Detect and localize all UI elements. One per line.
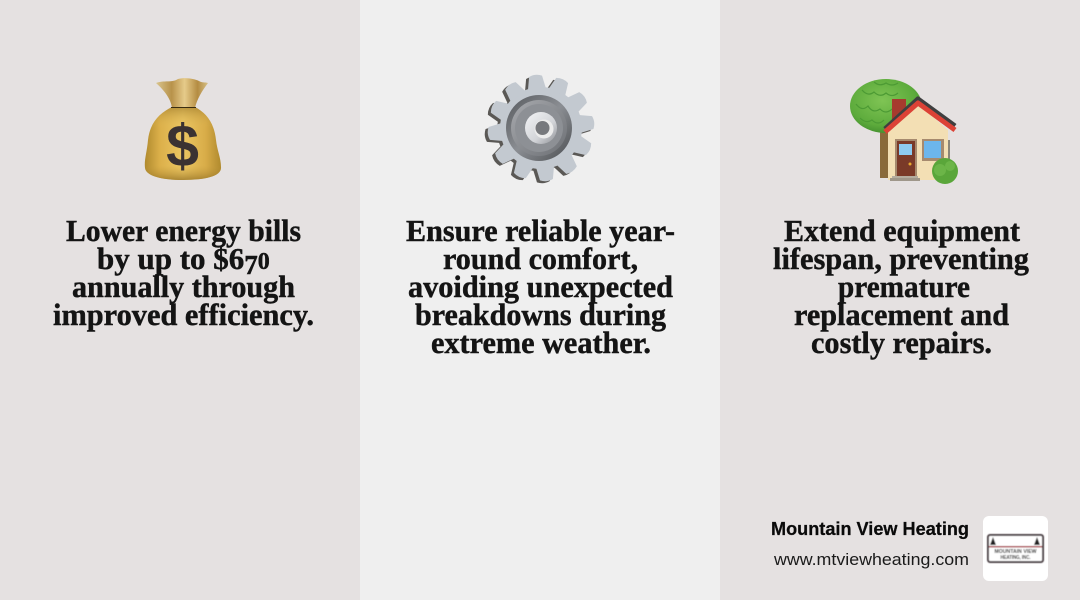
panel: right background [720, 0, 1080, 600]
text block: center column: breakdowns during [415, 297, 666, 332]
text block: left column: Lower energy bills [66, 213, 301, 248]
text block: left column: by up to $6 [97, 241, 244, 276]
text block: left column: 0 [258, 249, 270, 275]
text block: right column: premature [838, 269, 970, 304]
text block: right column: lifespan, preventing [773, 241, 1029, 276]
text block: center column: Ensure reliable year- [406, 213, 675, 248]
icon: money bag [145, 78, 221, 180]
logo: MOUNTAIN VIEW [994, 549, 1037, 555]
text block: right column: costly repairs. [811, 325, 992, 360]
icon: gear [484, 74, 595, 184]
panel: center background [360, 0, 720, 600]
text block: right column [773, 213, 1029, 360]
text block: left column: annually through [72, 269, 295, 304]
text block: right column: Extend equipment [784, 213, 1021, 248]
footer: website: www.mtviewheating.com [773, 550, 969, 569]
text block: left column: improved efficiency. [53, 297, 314, 332]
logo [983, 516, 1048, 581]
text block: center column: avoiding unexpected [408, 269, 673, 304]
text block: right column: replacement and [794, 297, 1009, 332]
footer: company name: Mountain View Heating [771, 519, 969, 539]
text block: center column [406, 213, 675, 360]
icon: house with tree [850, 79, 958, 184]
text block: center column: round comfort, [443, 241, 638, 276]
logo: HEATING, INC. [1000, 555, 1031, 561]
text block: left column: 7 [244, 250, 258, 280]
text block: left column [53, 213, 314, 332]
text block: center column: extreme weather. [431, 325, 651, 360]
icon: money bag: $ [166, 113, 199, 179]
panel: left background [0, 0, 360, 600]
